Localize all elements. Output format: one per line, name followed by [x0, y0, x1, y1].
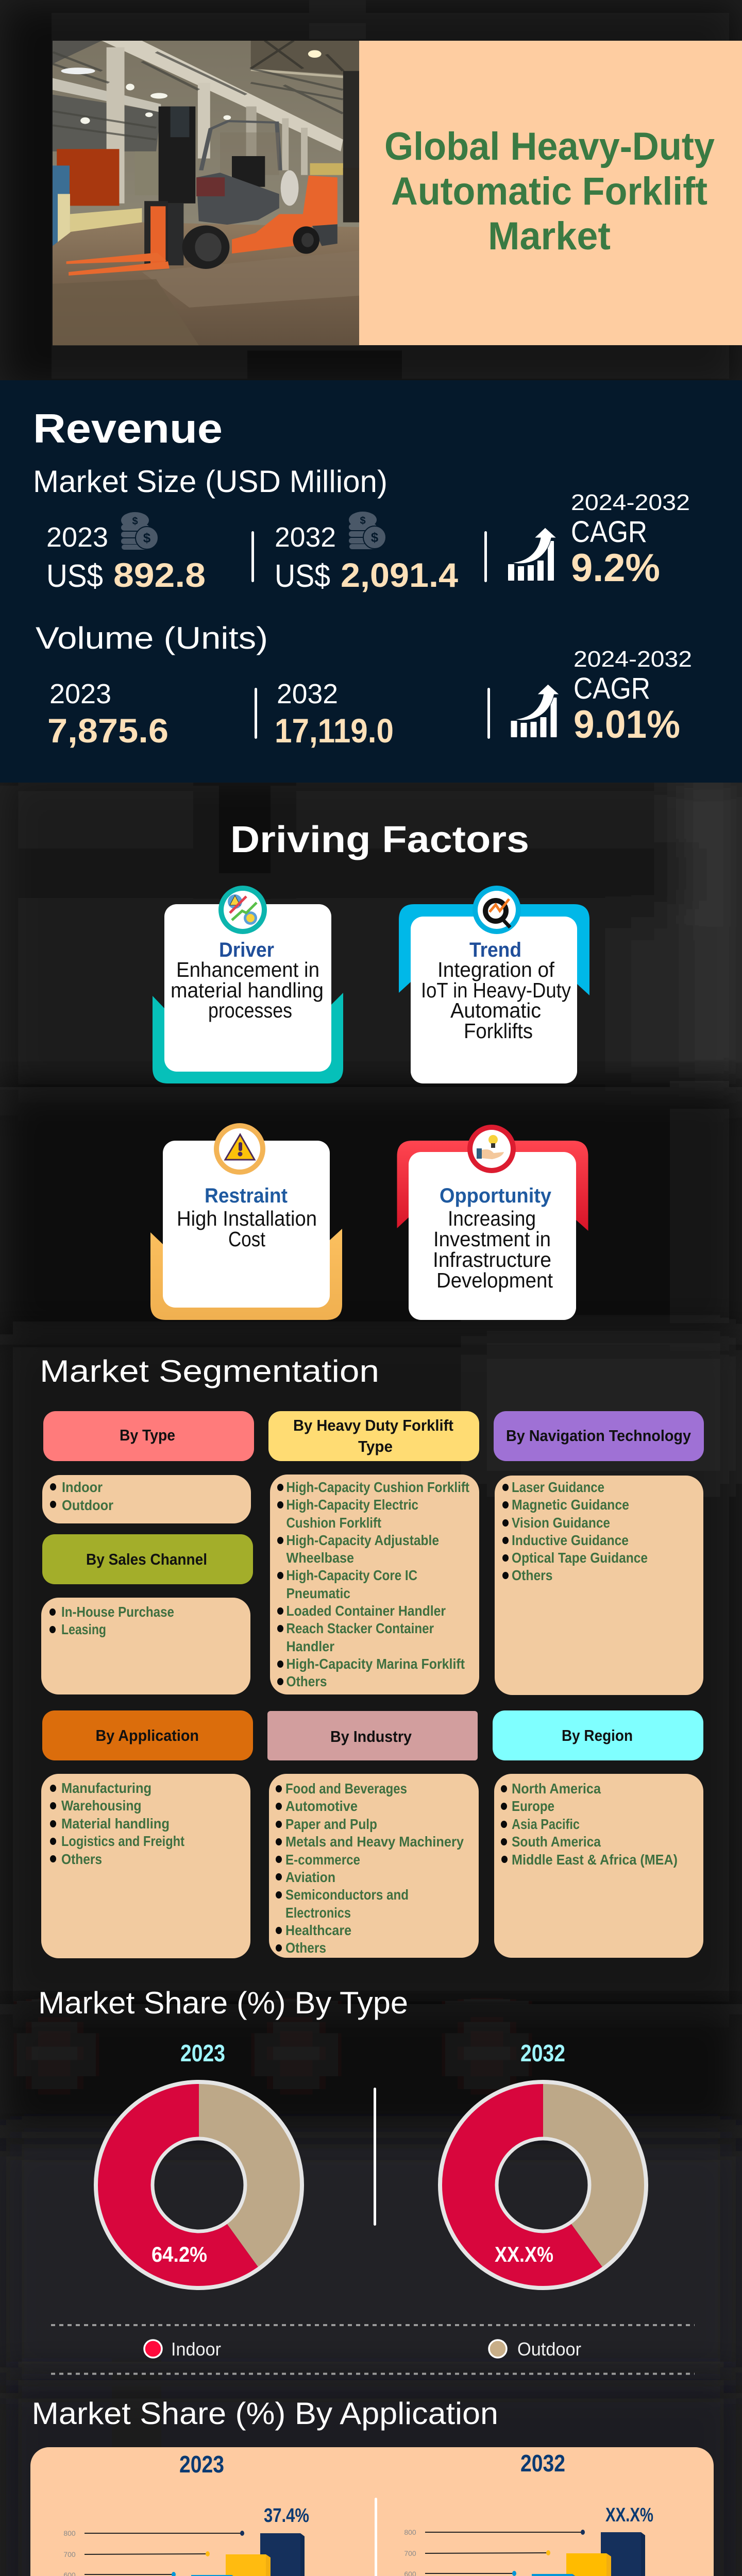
segment header: by type: [43, 1411, 254, 1461]
title: Market: [488, 214, 611, 258]
bar chart 2032: 800: [404, 2528, 416, 2536]
list: heavy duty forklift type: Wheelbase: [286, 1550, 354, 1566]
icon: idea in hand: [477, 1135, 504, 1159]
icon: coins 2032: $: [371, 530, 379, 545]
list: industry: Food and Beverages: [285, 1781, 407, 1797]
list: industry: Semiconductors and: [285, 1887, 409, 1903]
restraint text: Restraint: [205, 1184, 288, 1207]
volume block: 2032: [277, 679, 338, 709]
restraint text: [177, 1184, 317, 1251]
list: heavy duty forklift type: High-Capacity Core IC: [286, 1567, 417, 1583]
bar chart 2032: 2032: [520, 2450, 565, 2477]
icon: growth chart volume: [511, 684, 560, 737]
title: Automatic Forklift: [391, 170, 707, 213]
segment header: by heavy duty forklift type: [268, 1411, 479, 1461]
card: driver: [153, 886, 343, 1083]
chart: donut 2032: XX.X%: [495, 2242, 553, 2266]
volume block: 2024-2032: [574, 647, 692, 672]
chart: donut 2023: 2023: [180, 2040, 225, 2066]
market size block: 2023: [46, 522, 108, 553]
icon: coins 2023: $: [143, 530, 151, 546]
list: navigation technology: Laser Guidance: [512, 1479, 604, 1495]
segment header: by heavy duty forklift type: Type: [358, 1437, 393, 1455]
segment header: by application: [42, 1710, 253, 1760]
segment header: by industry: [267, 1711, 478, 1760]
segment header: by sales channel: [42, 1534, 253, 1584]
heading: market share by type: Market Share (%) By Type: [38, 1986, 408, 2020]
volume block: [36, 621, 692, 750]
panel: application charts: [30, 2447, 714, 2576]
list: sales channel: Leasing: [61, 1621, 106, 1637]
list: heavy duty forklift type: Reach Stacker Container: [286, 1620, 434, 1636]
list: heavy duty forklift type: Loaded Container Handler: [286, 1603, 446, 1619]
chart: donut 2023: 64.2%: [151, 2242, 207, 2266]
bar chart 2023: 37.4%: [264, 2505, 309, 2527]
icon: coins 2023: [121, 512, 158, 550]
heading: revenue: Revenue: [33, 405, 223, 451]
volume block: 2023: [49, 679, 111, 709]
bar chart 2023: 700: [63, 2550, 76, 2558]
list: heavy duty forklift type: High-Capacity Marina Forklift: [286, 1656, 465, 1672]
bar chart 2023: 800: [63, 2529, 76, 2537]
list: navigation technology: Optical Tape Guidance: [512, 1550, 648, 1566]
market size block: [33, 464, 690, 594]
volume block: Volume (Units): [36, 621, 268, 655]
list: navigation technology: Others: [512, 1567, 552, 1583]
opportunity text: Development: [436, 1268, 553, 1292]
list: heavy duty forklift type: High-Capacity Electric: [286, 1497, 418, 1513]
bar chart 2023: [63, 2451, 309, 2576]
restraint text: High Installation: [177, 1207, 317, 1230]
trend text: Trend: [469, 939, 521, 961]
list: industry: E-commerce: [285, 1852, 360, 1868]
list: heavy duty forklift type: High-Capacity Adjustable: [286, 1532, 439, 1548]
panel: revenue: [0, 380, 742, 783]
list: heavy duty forklift type: [270, 1475, 479, 1694]
trend text: [421, 939, 571, 1043]
segment header: by heavy duty forklift type: By Heavy Duty Forklift: [293, 1416, 453, 1434]
list: region: South America: [512, 1834, 601, 1850]
opportunity text: [433, 1184, 553, 1292]
chart: donut 2032: [440, 2040, 646, 2288]
list: navigation technology: [495, 1476, 703, 1695]
market size block: 2024-2032: [571, 490, 690, 515]
volume block: CAGR: [574, 672, 650, 705]
opportunity text: Infrastructure: [433, 1248, 551, 1272]
driver text: processes: [208, 998, 292, 1022]
forklift photo: [53, 41, 359, 345]
list: region: North America: [512, 1781, 601, 1797]
list: industry: Electronics: [285, 1905, 351, 1921]
list: region: [494, 1774, 703, 1958]
list: type: Outdoor: [62, 1497, 113, 1513]
heading: market segmentation: Market Segmentation: [40, 1354, 379, 1388]
market size block: 2032: [275, 522, 336, 553]
card: trend: [399, 886, 589, 1083]
legend: type: Indoor: [171, 2338, 221, 2360]
icon: growth chart revenue: [508, 528, 556, 581]
list: application: Logistics and Freight: [61, 1833, 184, 1849]
market size block: 9.2%: [571, 546, 660, 590]
list: industry: Aviation: [285, 1869, 335, 1885]
list: heavy duty forklift type: Handler: [286, 1638, 334, 1654]
list: heavy duty forklift type: Others: [286, 1673, 327, 1689]
list: industry: Others: [285, 1940, 326, 1956]
icon: trend: [485, 899, 510, 927]
hero panel: [53, 41, 742, 345]
card: opportunity: [397, 1125, 588, 1320]
driver text: material handling: [171, 978, 324, 1002]
volume block: 7,875.6: [47, 711, 168, 750]
list: region: Middle East & Africa (MEA): [512, 1852, 678, 1868]
list: application: Warehousing: [61, 1798, 141, 1814]
list: industry: Metals and Heavy Machinery: [285, 1834, 464, 1850]
list: industry: Automotive: [285, 1798, 358, 1814]
heading: driving factors: Driving Factors: [230, 819, 529, 860]
list: application: Manufacturing: [61, 1780, 151, 1796]
icon: coins 2032: $: [360, 515, 366, 527]
volume block: 9.01%: [574, 703, 680, 747]
market size block: Market Size (USD Million): [33, 464, 387, 499]
segment header: by application: By Application: [96, 1726, 199, 1744]
list: type: Indoor: [62, 1479, 103, 1495]
segment header: by navigation technology: [494, 1411, 704, 1461]
trend text: Automatic: [450, 998, 541, 1022]
list: application: [41, 1774, 250, 1958]
market size block: US$: [275, 558, 330, 594]
title: Global Heavy-Duty: [384, 125, 715, 168]
title background: [359, 41, 742, 345]
restraint text: Cost: [228, 1227, 266, 1251]
trend text: Integration of: [437, 958, 555, 981]
icon: coins 2023: $: [132, 516, 138, 527]
volume block: 17,119.0: [275, 711, 394, 750]
bar chart 2032: [404, 2450, 653, 2576]
list: sales channel: [41, 1598, 250, 1694]
list: navigation technology: Vision Guidance: [512, 1515, 610, 1531]
list: sales channel: In-House Purchase: [61, 1604, 174, 1620]
opportunity text: Opportunity: [440, 1184, 552, 1207]
driver text: Driver: [219, 939, 274, 961]
list: industry: [269, 1774, 479, 1958]
heading: market share by application: Market Share (%) By Application: [32, 2396, 498, 2431]
divider between donuts: [374, 2088, 376, 2226]
market size block: 2,091.4: [341, 556, 458, 594]
trend text: IoT in Heavy-Duty: [421, 978, 571, 1002]
driver text: [171, 939, 324, 1022]
segmentation grid: [41, 1411, 704, 1958]
opportunity text: Increasing: [448, 1207, 536, 1230]
list: industry: Healthcare: [285, 1922, 351, 1938]
list: application: Material handling: [61, 1816, 170, 1832]
bar chart 2032: XX.X%: [605, 2504, 653, 2526]
market size block: CAGR: [571, 515, 647, 549]
driver text: Enhancement in: [176, 958, 319, 981]
trend text: Forklifts: [464, 1019, 533, 1043]
list: navigation technology: Magnetic Guidance: [512, 1497, 629, 1513]
list: heavy duty forklift type: High-Capacity Cushion Forklift: [286, 1479, 469, 1495]
legend: type: Outdoor: [517, 2338, 581, 2360]
list: application: Others: [61, 1851, 102, 1867]
icon: warning triangle: [225, 1134, 255, 1160]
bar chart 2032: 700: [404, 2549, 416, 2557]
list: navigation technology: Inductive Guidance: [512, 1532, 629, 1548]
icon: driver: [228, 894, 257, 925]
opportunity text: Investment in: [433, 1227, 551, 1251]
card: restraint: [150, 1123, 342, 1320]
legend: type: [51, 2325, 695, 2374]
segment header: by region: By Region: [562, 1726, 633, 1744]
list: heavy duty forklift type: Pneumatic: [286, 1585, 350, 1601]
list: region: Europe: [512, 1798, 554, 1814]
segment header: by region: [493, 1710, 703, 1760]
chart: donut 2023: [96, 2040, 302, 2288]
list: industry: Paper and Pulp: [285, 1816, 377, 1832]
list: type: [42, 1475, 251, 1523]
list: region: Asia Pacific: [512, 1816, 580, 1832]
segment header: by navigation technology: By Navigation Technology: [506, 1427, 692, 1445]
icon: coins 2032: [349, 512, 386, 549]
segment header: by industry: By Industry: [330, 1727, 412, 1745]
list: heavy duty forklift type: Cushion Forklift: [286, 1515, 381, 1531]
market size block: US$: [46, 558, 103, 594]
segment header: by type: By Type: [120, 1426, 175, 1444]
market size block: 892.8: [113, 556, 206, 594]
title: [384, 125, 715, 258]
segment header: by sales channel: By Sales Channel: [86, 1550, 207, 1568]
chart: donut 2032: 2032: [520, 2040, 565, 2066]
bar chart 2023: 2023: [179, 2451, 224, 2478]
